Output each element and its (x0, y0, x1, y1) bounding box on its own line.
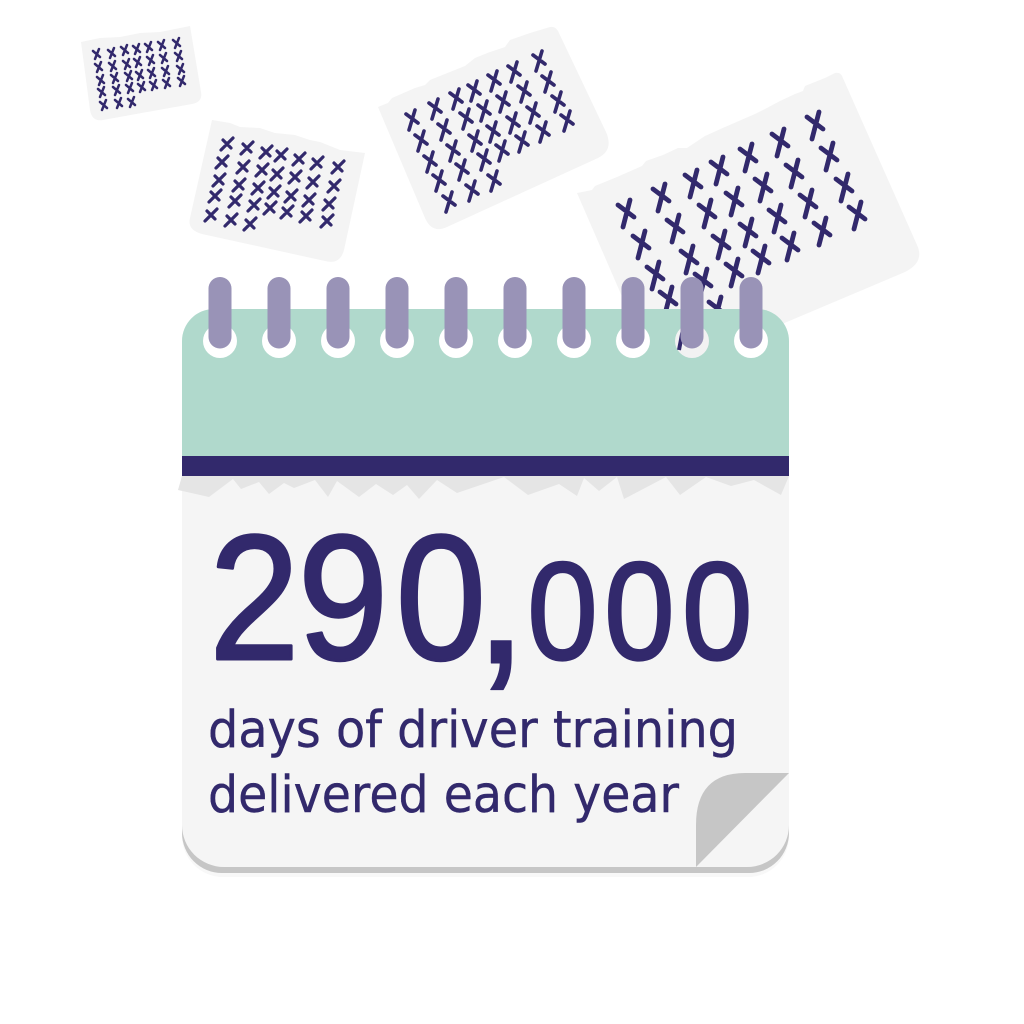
torn paper strip (178, 476, 789, 499)
headline number (209, 476, 752, 708)
calendar sheet: small top left (81, 26, 201, 120)
calendar sheet: top centre (378, 27, 609, 229)
caption (208, 701, 738, 825)
headline number: 000 (527, 535, 752, 689)
caption: days of driver training (208, 701, 738, 760)
calendar bottom edge (182, 700, 789, 873)
headline number: , (472, 476, 530, 708)
calendar drop shadow (182, 700, 789, 877)
green calendar header (182, 309, 789, 456)
caption: delivered each year (208, 766, 679, 825)
dark header band (182, 456, 789, 476)
headline number: 290 (209, 499, 486, 698)
spiral binding rings (208, 277, 762, 348)
calendar page body (182, 476, 789, 867)
calendar sheet: second from left (190, 120, 365, 262)
page curl (696, 773, 789, 867)
calendar sheet: large right (577, 73, 919, 377)
binding holes (203, 324, 768, 358)
calendar (178, 277, 789, 877)
